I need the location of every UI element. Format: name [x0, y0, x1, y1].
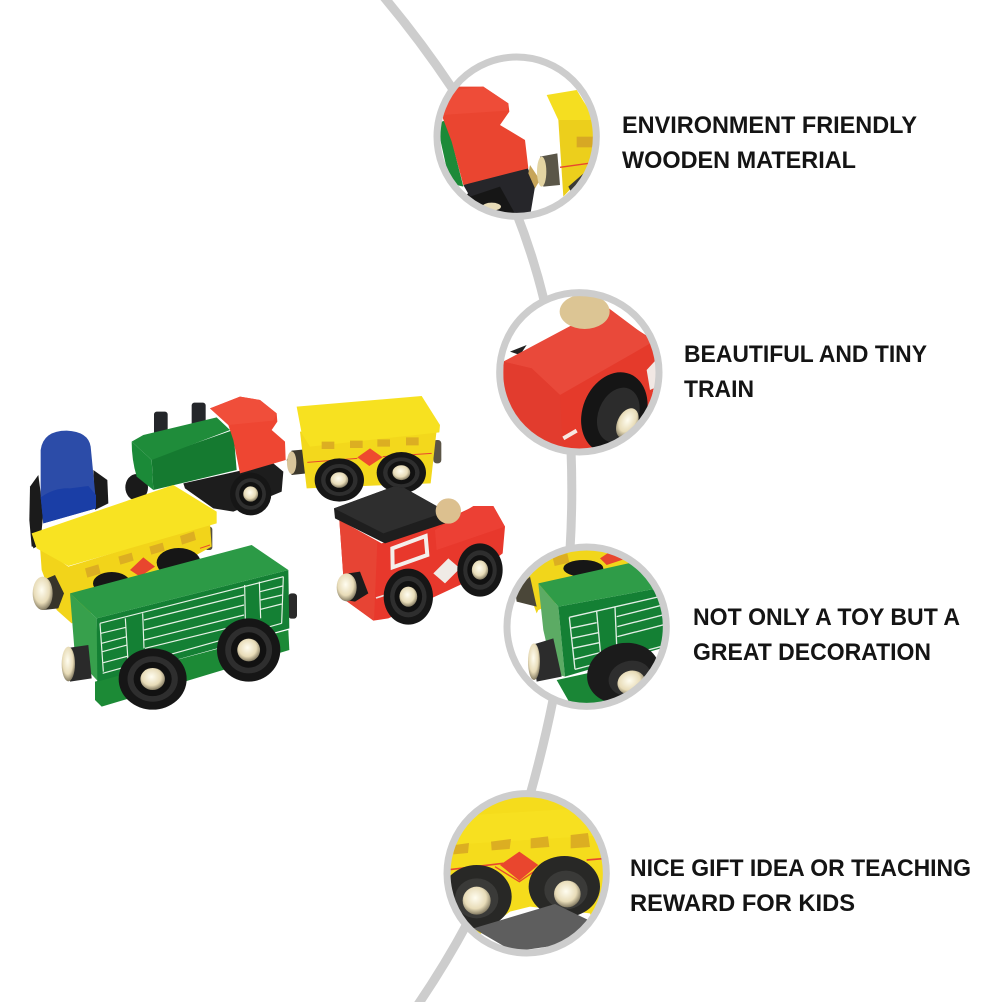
green engine with red cab: [125, 397, 286, 515]
caption 3: NOT ONLY A TOY BUT A: [693, 604, 960, 631]
blue tanker car: [29, 431, 108, 547]
circle 1: detail of cab and coupler: [437, 57, 596, 248]
caption 4: REWARD FOR KIDS: [630, 890, 855, 917]
caption 4: NICE GIFT IDEA OR TEACHING: [630, 855, 971, 882]
connecting curved line: [383, 0, 572, 1002]
caption 2: TRAIN: [684, 376, 754, 403]
yellow passenger car, left: [30, 485, 217, 623]
red engine with black roof: [334, 487, 505, 625]
yellow passenger car, right: [287, 396, 441, 502]
circle 1 ring: [437, 57, 596, 216]
caption 4: [630, 855, 971, 917]
caption 3: [693, 604, 960, 666]
caption 2: [684, 341, 927, 403]
caption 1: ENVIRONMENT FRIENDLY: [622, 112, 917, 139]
caption 1: WOODEN MATERIAL: [622, 147, 856, 174]
circle 4 ring: [447, 794, 606, 953]
circle 3 ring: [507, 547, 666, 706]
caption 3: GREAT DECORATION: [693, 639, 931, 666]
circle 3: detail of green freight car: [507, 547, 667, 712]
circle 2 ring: [500, 293, 659, 452]
green freight car with white lines: [62, 545, 297, 710]
caption 2: BEAUTIFUL AND TINY: [684, 341, 927, 368]
circle 2: detail of red engine: [500, 293, 659, 463]
caption 1: [622, 112, 917, 174]
circle 4: detail of yellow car wheels: [442, 794, 607, 957]
train photo: toy train cars: [29, 396, 505, 710]
